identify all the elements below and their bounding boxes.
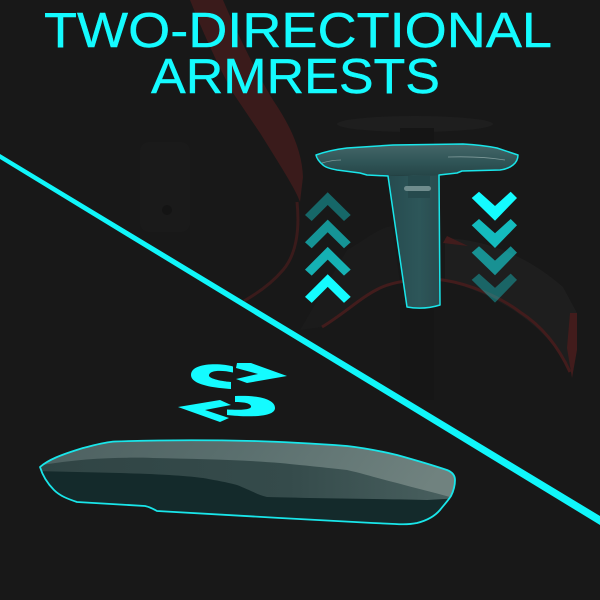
down chevrons bbox=[472, 192, 517, 303]
faded chair behind the upper armrest bbox=[140, 0, 577, 400]
diagonal divider line bbox=[0, 154, 600, 525]
upper armrest with cyan outline bbox=[316, 144, 518, 308]
title: ARMRESTS bbox=[151, 50, 440, 104]
height lever bbox=[404, 186, 431, 191]
title bbox=[44, 4, 552, 104]
up chevrons bbox=[305, 192, 351, 303]
title: TWO-DIRECTIONAL bbox=[44, 4, 552, 58]
lower armrest with cyan outline bbox=[30, 436, 462, 528]
rotation arrows bbox=[178, 363, 287, 422]
